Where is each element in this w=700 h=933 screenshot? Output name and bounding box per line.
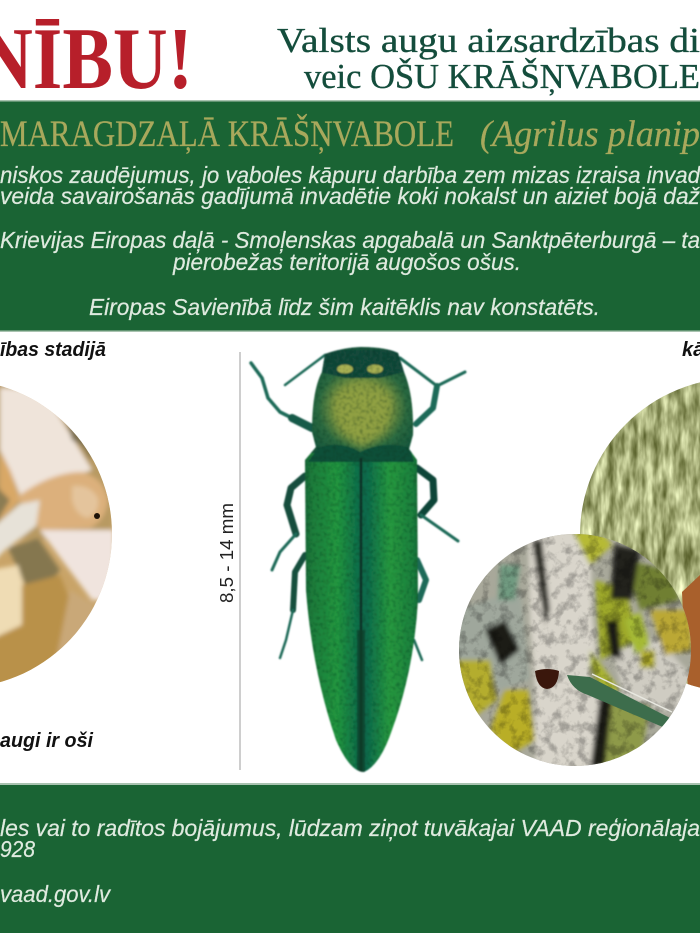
- beetle body: [300, 345, 425, 780]
- size ruler: 8,5 - 14 mm: [217, 503, 237, 603]
- description text: Krievijas Eiropas daļā - Smoļenskas apgabalā un Sanktpēterburgā – ta: [0, 227, 700, 253]
- description text: Eiropas Savienībā līdz šim kaitēklis nav konstatēts.: [89, 294, 600, 320]
- contact text: 928: [0, 836, 35, 862]
- caption: larval stage: ības stadijā: [0, 339, 106, 361]
- heading: service announcement: veic OŠU KRĀŠŅVABOLE: [304, 57, 700, 96]
- species title: MARAGDZAĻĀ KRĀŠŅVABOLE: [0, 113, 454, 155]
- heading: service announcement: [277, 21, 700, 96]
- description text: [0, 162, 700, 320]
- brown exposed wood: [682, 575, 700, 690]
- panel: description band: [0, 100, 700, 332]
- tweezers: [567, 675, 670, 728]
- photo: larva under bark: [0, 378, 114, 695]
- description text: pierobežas teritorijā augošos ošus.: [172, 249, 521, 275]
- beetle antennae and legs: [251, 355, 465, 660]
- panel: contact band: [0, 783, 700, 933]
- beetle illustration: [251, 345, 465, 780]
- description text: veida savairošanās gadījumā invadētie koki nokalst un aiziet bojā daž: [0, 183, 700, 209]
- photo: exit hole with tweezers: [455, 530, 695, 770]
- contact text: vaad.gov.lv: [0, 881, 111, 907]
- caption: host plants: augi ir oši: [0, 730, 93, 752]
- heading: service announcement: Valsts augu aizsardzības di: [277, 21, 700, 60]
- contact text: les vai to radītos bojājumus, lūdzam ziņot tuvākajai VAAD reģionālaja: [0, 815, 700, 841]
- contact text: [0, 815, 700, 907]
- photo: ash bark: [575, 375, 700, 695]
- species title: (Agrilus planip: [480, 114, 700, 155]
- exit hole: [535, 669, 559, 689]
